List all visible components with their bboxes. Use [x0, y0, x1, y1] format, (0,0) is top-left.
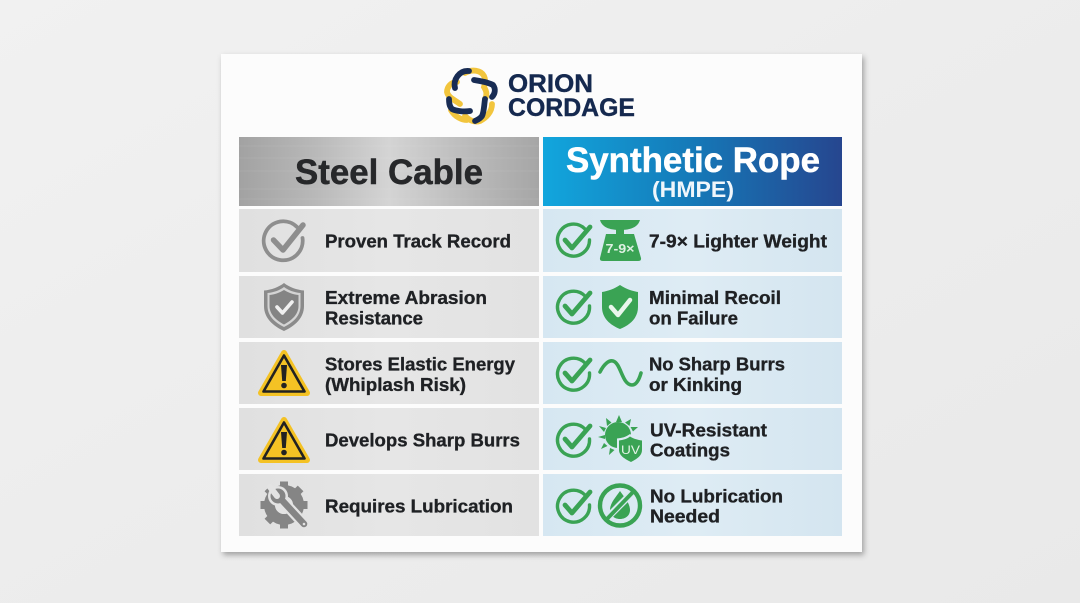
icon: grey shield: [264, 283, 304, 331]
row: Proven Track Record: Proven Track Record: [325, 230, 511, 252]
icon: green check: [558, 291, 590, 323]
row: Develops Sharp Burrs: [239, 408, 539, 470]
row: No Sharp Burrs: or Kinking: [649, 374, 742, 395]
row: Proven Track Record: [239, 209, 539, 272]
row: Extreme Abrasion Resistance: [239, 276, 539, 338]
icon: gear and wrench: [260, 482, 308, 528]
icon: green shield: [602, 285, 638, 329]
heading: Synthetic Rope (HMPE): (HMPE): [652, 177, 734, 202]
logo: Orion Cordage: [447, 70, 635, 122]
heading: Steel Cable: [239, 137, 539, 206]
icon: sun and UV shield: UV: [621, 445, 640, 457]
row: No Sharp Burrs: No Sharp Burrs: [649, 354, 785, 375]
heading: Steel Cable: Steel Cable: [295, 153, 483, 192]
row: UV-Resistant Coatings: UV-Resistant: [650, 420, 767, 441]
panel: steel cable column: [239, 137, 539, 536]
panel: synthetic rope column: [543, 137, 842, 536]
row: No Lubrication Needed: Needed: [650, 505, 720, 526]
row: Requires Lubrication: Requires Lubrication: [325, 495, 513, 516]
row: UV-Resistant Coatings: [543, 408, 842, 470]
row: Minimal Recoil: Minimal Recoil: [649, 287, 781, 308]
icon: sun and UV shield: [598, 415, 644, 464]
heading: Synthetic Rope (HMPE): Synthetic Rope: [566, 141, 820, 180]
row: No Lubrication Needed: No Lubrication: [650, 485, 783, 506]
icon: interlaced rope knot: [447, 71, 495, 122]
wordmark: ORION: [508, 70, 593, 98]
icon: weight scale: [600, 220, 641, 261]
icon: crossed oil drop: [600, 486, 640, 526]
row: Requires Lubrication: [239, 474, 539, 536]
icon: grey check: [264, 221, 303, 260]
row: Stores Elastic Energy: (Whiplash Risk): [325, 374, 466, 395]
icon: green check: [558, 358, 590, 390]
icon: green check: [558, 224, 590, 256]
row: Lighter Weight: [543, 209, 842, 272]
row: Stores Elastic Energy: [239, 342, 539, 404]
icon: rope wave: [600, 361, 641, 385]
row: Minimal Recoil: [543, 276, 842, 338]
row: No Sharp Burrs: [543, 342, 842, 404]
panel: comparison card: [221, 54, 862, 552]
row: Stores Elastic Energy: Stores Elastic Energy: [325, 354, 516, 375]
row: Extreme Abrasion Resistance: Extreme Abrasion: [325, 287, 487, 308]
row: Develops Sharp Burrs: Develops Sharp Burrs: [325, 430, 520, 451]
row: Minimal Recoil: on Failure: [649, 308, 738, 328]
heading: Synthetic Rope (HMPE): [543, 137, 842, 206]
wordmark: CORDAGE: [508, 94, 635, 122]
row: UV-Resistant Coatings: Coatings: [650, 440, 730, 461]
row: Extreme Abrasion Resistance: Resistance: [325, 308, 423, 328]
icon: green check: [558, 490, 590, 522]
icon: green check: [558, 424, 590, 456]
icon: weight scale: 7-9×: [606, 241, 635, 256]
wordmark: [508, 70, 635, 122]
row: No Lubrication Needed: [543, 474, 842, 536]
row: Lighter Weight: 7-9× Lighter Weight: [649, 230, 827, 252]
icon: warning triangle: [261, 353, 307, 393]
icon: warning triangle: [261, 420, 307, 460]
